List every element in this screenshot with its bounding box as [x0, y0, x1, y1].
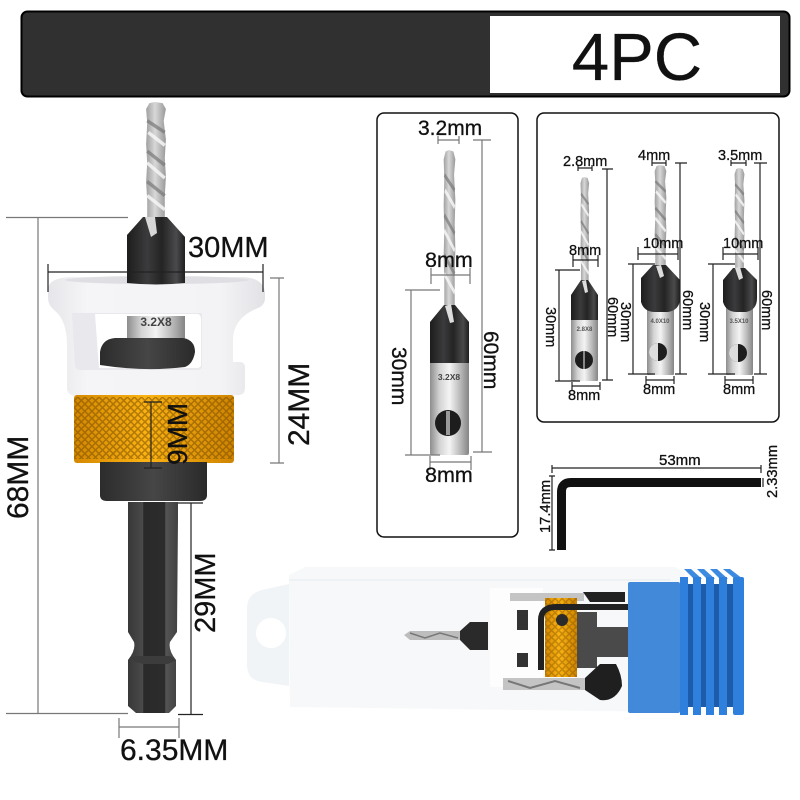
3.2mm bit	[430, 150, 469, 455]
3.5mm bit: 3.5X10	[729, 319, 749, 325]
dimension: 30MM: 30MM	[188, 232, 269, 264]
wrench in tube	[541, 607, 628, 670]
dimension: 24MM	[270, 278, 316, 463]
dimension: 9MM	[144, 402, 193, 468]
dark collar	[100, 462, 207, 501]
2.8mm bit	[571, 177, 598, 381]
dimension labels: 3.2mm	[418, 117, 482, 140]
4mm dimensions	[617, 148, 695, 398]
4mm dimensions: 4mm	[638, 148, 670, 164]
icon: L-shaped wrench	[562, 482, 761, 550]
dimension: 30MM	[48, 232, 269, 292]
3.5mm dimensions: 10mm	[723, 236, 763, 252]
main product: countersink bit with depth stop	[48, 102, 265, 713]
2.8mm dimensions: 60mm	[604, 297, 620, 337]
3.2mm bit: 3.2X8	[438, 372, 460, 382]
dimension labels: 8mm	[425, 248, 473, 272]
clear tube body and hanging tab	[247, 567, 685, 712]
header label box	[490, 16, 780, 95]
dimension: 29MM: 29MM	[190, 552, 222, 633]
small bit in tube	[404, 622, 488, 650]
main product: countersink bit with depth stop: 3.2X8	[140, 315, 172, 329]
2.8mm dimensions: 2.8mm	[563, 154, 607, 170]
dimension labels: 30mm	[387, 347, 410, 405]
hex shank	[128, 502, 178, 713]
4mm dimensions: 60mm	[679, 290, 695, 330]
wrench dimensions: 53mm	[659, 452, 701, 469]
blue cap	[628, 582, 680, 713]
3.5mm dimensions: 3.5mm	[718, 148, 762, 164]
3.5mm dimensions: 30mm	[696, 302, 712, 342]
3.5mm dimensions	[696, 148, 774, 398]
dimension: 24MM: 24MM	[283, 363, 316, 446]
black collar in tube	[577, 612, 628, 668]
4mm dimensions: 8mm	[643, 382, 675, 398]
dimension: 29MM	[178, 503, 222, 715]
silver shank in window	[127, 316, 185, 342]
header banner	[22, 12, 790, 96]
dimension labels: 60mm	[479, 331, 502, 389]
panel: three other bits	[537, 113, 779, 422]
2.8mm dimensions	[542, 154, 620, 404]
collar window details	[517, 610, 528, 667]
knurled gold ring	[74, 395, 234, 463]
2.8mm dimensions: 30mm	[542, 307, 558, 347]
white stop collar	[48, 276, 265, 398]
hex key wrench with dimensions	[538, 445, 781, 550]
4mm bit	[641, 165, 680, 375]
blue ribbed end	[680, 569, 744, 715]
dimension: 68MM: 68MM	[2, 436, 35, 519]
2.8mm bit: 2.8X8	[577, 327, 593, 333]
black ring	[100, 338, 195, 369]
drill twist	[146, 102, 166, 219]
countersink head	[127, 217, 185, 284]
4mm dimensions: 10mm	[643, 236, 683, 252]
dimension labels	[387, 117, 502, 487]
wrench dimensions: 2.33mm	[765, 445, 781, 498]
4mm bit: 4.0X10	[650, 319, 670, 325]
dimension: 9MM: 9MM	[162, 403, 193, 465]
panel: single 3.2mm bit	[377, 113, 518, 537]
3.5mm dimensions: 8mm	[723, 382, 755, 398]
lower drill bit	[503, 664, 622, 700]
dimension labels: 8mm	[425, 463, 473, 487]
header label box: 4PC	[572, 20, 702, 95]
gold ring in tube	[545, 598, 577, 677]
3.5mm bit	[723, 168, 757, 375]
dimension: 68MM	[2, 217, 128, 714]
dimension: 6.35MM	[119, 718, 228, 767]
2.8mm dimensions: 8mm	[569, 243, 601, 259]
3.5mm dimensions: 60mm	[758, 290, 774, 330]
4mm dimensions: 30mm	[617, 302, 633, 342]
dimension: 6.35MM: 6.35MM	[120, 734, 228, 767]
wrench dimensions: 17.4mm	[538, 480, 554, 533]
white collar inside tube	[490, 588, 543, 687]
rear drill bit	[510, 592, 625, 602]
2.8mm dimensions: 8mm	[568, 388, 600, 404]
clear storage tube with blue cap	[247, 567, 744, 715]
wrench dimensions	[538, 445, 781, 550]
